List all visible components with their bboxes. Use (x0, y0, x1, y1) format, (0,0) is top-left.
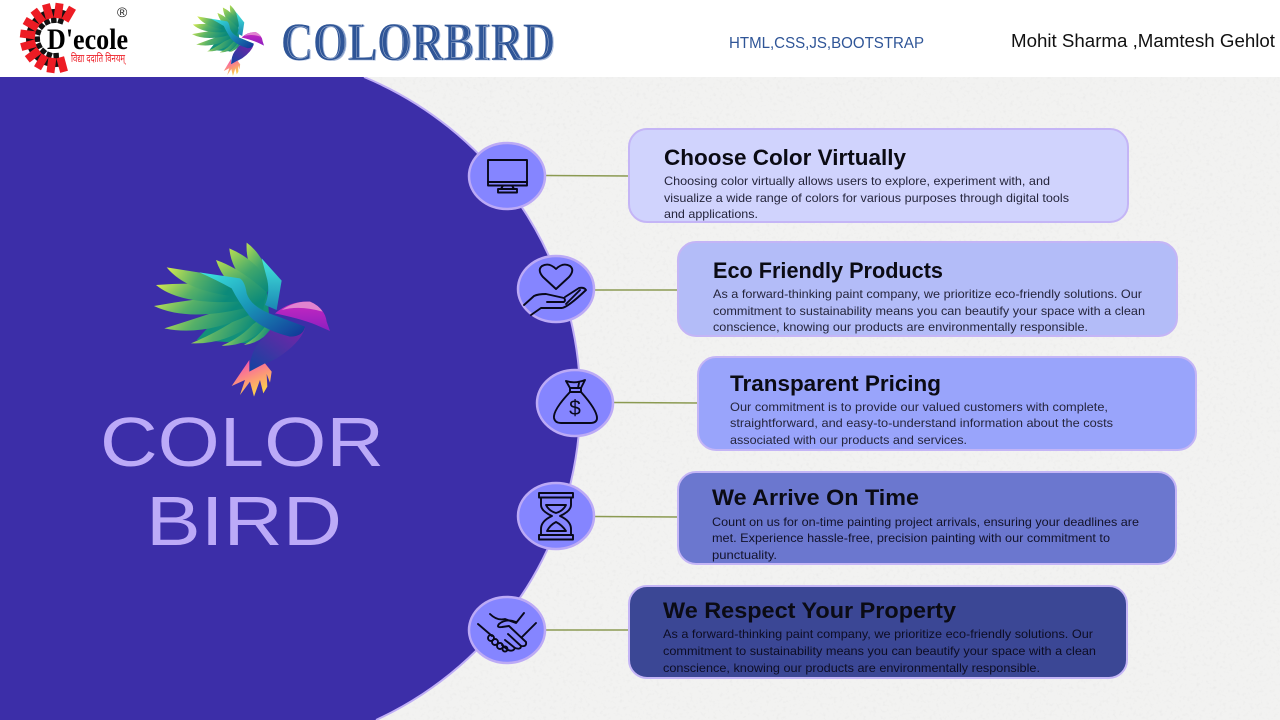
logo: Decole: ® (117, 4, 128, 20)
card: We Arrive On Time: punctuality. (712, 548, 777, 562)
card: We Respect Your Property: We Respect Your Property (663, 598, 957, 623)
brand title: COLORBIRD (281, 12, 555, 72)
large bird illustration (154, 243, 330, 397)
card: Choose Color Virtually: and applications. (664, 207, 758, 221)
card: Eco Friendly Products: As a forward-thinking paint company, we prioritize eco-friendly solutions. Our (713, 287, 1142, 301)
card: We Arrive On Time: We Arrive On Time (712, 485, 919, 510)
brand title: COLORBIRD (281, 12, 555, 72)
card: Choose Color Virtually (629, 129, 1128, 222)
card: We Arrive On Time: met. Experience hassle-free, precision painting with our commitment to (712, 531, 1110, 545)
card: Eco Friendly Products: commitment to sustainability means you can beautify your space with a clean (713, 304, 1145, 318)
logo: Decole: विद्या ददाति विनयम् (71, 52, 126, 65)
card: Eco Friendly Products (678, 242, 1177, 336)
icon: computer monitor (469, 143, 545, 209)
panel title: COLOR BIRD: BIRD (146, 482, 342, 560)
left purple panel with curved edge (0, 77, 580, 720)
card: We Respect Your Property (629, 586, 1127, 678)
icon: small bird (192, 5, 264, 76)
panel title: COLOR BIRD: COLOR (100, 403, 384, 481)
logo: Decole: D'ecole (47, 23, 128, 56)
card: Transparent Pricing: straightforward, and easy-to-understand information about the costs (730, 416, 1113, 430)
icon: handshake (469, 597, 545, 663)
card: Eco Friendly Products: conscience, knowing our products are environmentally responsible. (713, 320, 1088, 334)
icon: hourglass (518, 483, 594, 549)
card: Eco Friendly Products: Eco Friendly Products (713, 258, 943, 283)
header bar (0, 0, 1280, 77)
card: Transparent Pricing (698, 357, 1196, 450)
item 4: We Arrive On Time (518, 472, 1176, 564)
card: We Respect Your Property: conscience, knowing our products are environmentally responsible. (663, 661, 1040, 675)
item 3: Transparent Pricing (537, 357, 1196, 450)
card: We Arrive On Time: Count on us for on-time painting project arrivals, ensuring your deadlines are (712, 515, 1139, 529)
authors: Mohit Sharma ,Mamtesh Gehlot (1011, 31, 1275, 51)
card: Choose Color Virtually: visualize a wide range of colors for various purposes through digital tools (664, 191, 1069, 205)
item 2: Eco Friendly Products (518, 242, 1177, 336)
icon: heart in hand (518, 256, 594, 322)
card: We Arrive On Time (678, 472, 1176, 564)
logo: Decole (20, 3, 129, 73)
icon: money bag (537, 370, 613, 436)
card: We Respect Your Property: commitment to sustainability means you can beautify your space with a clean (663, 644, 1096, 658)
card: Transparent Pricing: Transparent Pricing (730, 371, 941, 396)
tech stack: HTML,CSS,JS,BOOTSTRAP (729, 35, 924, 52)
connector lines (545, 176, 699, 630)
brand title: COLORBIRD (282, 12, 556, 72)
panel title: COLOR BIRD (100, 403, 384, 560)
card: Transparent Pricing: associated with our products and services. (730, 433, 967, 447)
card: Choose Color Virtually: Choose Color Virtually (664, 145, 906, 170)
card: Transparent Pricing: Our commitment is to provide our valued customers with complete, (730, 400, 1108, 414)
item 1: Choose Color Virtually (469, 129, 1128, 222)
card: We Respect Your Property: As a forward-thinking paint company, we prioritize eco-friendly solutions. Our (663, 627, 1093, 641)
icon: money bag: $ (569, 397, 581, 420)
item 5: We Respect Your Property (469, 586, 1127, 678)
card: Choose Color Virtually: Choosing color virtually allows users to explore, experiment with, and (664, 174, 1050, 188)
